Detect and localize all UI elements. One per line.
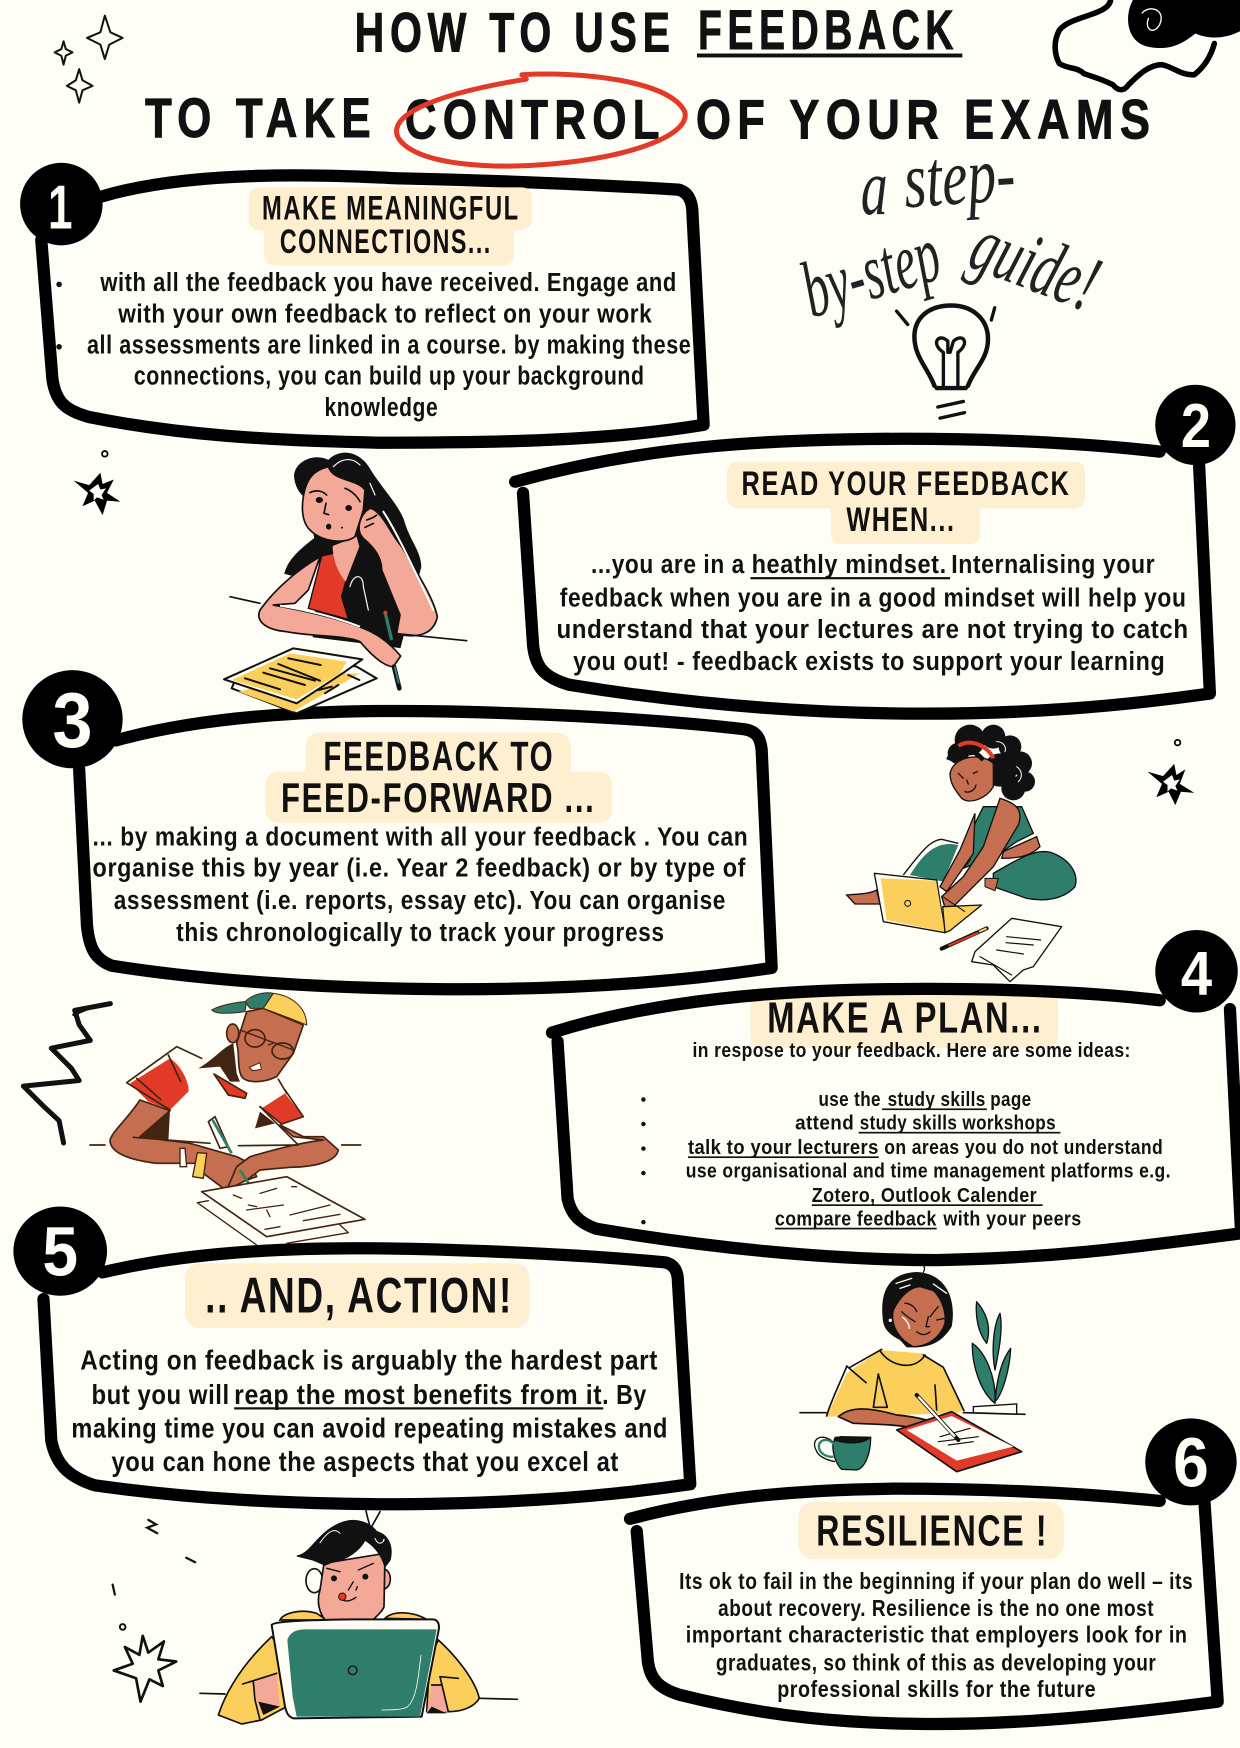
panel 2 body text: Internalising your — [951, 551, 1155, 579]
panel 2 heading: WHEN... — [846, 501, 956, 539]
panel 2: read your feedback when — [515, 385, 1236, 714]
panel 5 body text: Acting on feedback is arguably the hardest part — [80, 1344, 658, 1375]
panel 1 heading: MAKE MEANINGFUL — [262, 190, 520, 228]
panel 3 body text: ... by making a document with all your feedback . You can — [93, 823, 748, 851]
panel 3 heading — [265, 733, 612, 823]
panel 4 body text: page — [990, 1089, 1031, 1111]
panel 4: make a plan — [552, 930, 1240, 1260]
panel 3 frame — [79, 711, 772, 989]
panel 4 body text: study skills workshops — [860, 1113, 1056, 1135]
panel 2 number badge — [1155, 385, 1236, 465]
panel 6 number badge — [1145, 1418, 1237, 1505]
icon: light bulb — [897, 306, 995, 418]
panel 5 body text: but you will — [91, 1379, 230, 1410]
panel 4 number badge: 4 — [1181, 939, 1212, 1009]
panel 4 body text: study skills — [888, 1089, 986, 1111]
panel 6 body text: professional skills for the future — [777, 1676, 1096, 1702]
script subtitle: a step-by-step guide!: step- — [901, 129, 1018, 225]
panel 4 body text: in respose to your feedback. Here are some ideas: — [692, 1040, 1131, 1062]
title: HOW TO USE — [355, 1, 676, 63]
script subtitle: a step-by-step guide!: guide! — [959, 199, 1112, 329]
script subtitle: a step-by-step guide!: a — [861, 143, 888, 232]
decoration: star left of woman — [74, 451, 120, 515]
panel 5 body text: . By — [602, 1379, 647, 1410]
panel 4 body text: use organisational and time management platforms e.g. — [686, 1161, 1171, 1183]
panel 3 body text — [93, 823, 748, 947]
panel 2 frame — [515, 439, 1210, 714]
panel 5 number badge — [13, 1207, 107, 1296]
panel 4 body text: use the — [818, 1089, 881, 1111]
panel 5 number badge: 5 — [42, 1213, 78, 1291]
panel 2 number badge: 2 — [1181, 391, 1211, 461]
panel 6 heading — [798, 1502, 1064, 1559]
panel 4 body text: compare feedback — [775, 1209, 937, 1231]
panel 1 body text: knowledge — [324, 394, 438, 422]
panel 3: feedback to feed-forward — [22, 670, 772, 989]
panel 2 body text: ...you are in a — [591, 551, 745, 579]
illustration: woman sitting with yellow laptop — [847, 725, 1076, 982]
panel 2 heading — [727, 462, 1085, 544]
panel 4 body text: attend — [795, 1113, 854, 1135]
panel 2 body text: you out! - feedback exists to support your learning — [573, 648, 1165, 676]
icon: cloud scribble — [1055, 0, 1240, 90]
script subtitle: a step-by-step guide! — [791, 129, 1112, 335]
panel 5 body text: you can hone the aspects that you excel at — [112, 1446, 619, 1477]
illustration: woman in yellow tee with tablet and plant — [800, 1265, 1025, 1472]
title: TO TAKE — [145, 87, 377, 149]
panel 1 body text: all assessments are linked in a course. by making these — [87, 331, 691, 359]
panel 5 frame — [43, 1248, 690, 1504]
panel 1: make meaningful connections — [20, 163, 704, 443]
panel 2 body text — [556, 551, 1189, 676]
panel 1 body text: connections, you can build up your background — [134, 363, 645, 391]
decoration: zigzag scribble — [23, 1004, 110, 1143]
panel 1 heading: CONNECTIONS... — [280, 223, 492, 261]
panel 5 heading — [185, 1263, 530, 1328]
panel 4 number badge — [1155, 930, 1238, 1013]
panel 4 body text: with your peers — [942, 1209, 1082, 1231]
panel 4 body text: Zotero, Outlook Calender — [812, 1185, 1037, 1207]
panel 5 body text: making time you can avoid repeating mistakes and — [71, 1412, 668, 1443]
illustration: woman thinking with papers — [224, 453, 467, 713]
panel 2 body text: heathly mindset. — [752, 551, 947, 579]
title: CONTROL — [405, 88, 666, 150]
panel 1 number badge — [20, 163, 103, 245]
panel 5: and action — [13, 1207, 690, 1504]
illustration: man with green laptop — [200, 1511, 517, 1724]
panel 5 body text: reap the most benefits from it — [234, 1379, 602, 1410]
panel 1 frame — [41, 175, 704, 443]
panel 2 heading: READ YOUR FEEDBACK — [742, 465, 1071, 503]
panel 6: resilience — [630, 1418, 1237, 1724]
decoration: star and dashes beside laptop man — [113, 1520, 195, 1702]
panel 3 body text: organise this by year (i.e. Year 2 feedback) or by type of — [93, 854, 746, 882]
decoration: star right of sitting woman — [1147, 740, 1194, 805]
panel 1 heading — [249, 187, 532, 265]
panel 4 body text — [641, 1040, 1171, 1231]
panel 1 number badge: 1 — [48, 173, 72, 243]
red circle around CONTROL — [397, 74, 685, 166]
panel 3 heading: FEEDBACK TO — [323, 734, 554, 780]
panel 4 heading highlight and text — [750, 995, 1058, 1048]
panel 3 number badge: 3 — [52, 676, 93, 764]
panel 3 body text: assessment (i.e. reports, essay etc). You can organise — [114, 887, 726, 915]
illustration: man in cap writing — [90, 993, 365, 1245]
panel 2 body text: understand that your lectures are not trying to catch — [556, 616, 1189, 644]
title — [145, 0, 1156, 150]
panel 1 body text — [56, 269, 691, 422]
panel 5 heading: .. AND, ACTION! — [205, 1267, 513, 1323]
script subtitle: a step-by-step guide!: by-step — [791, 209, 950, 335]
panel 3 number badge — [22, 670, 123, 768]
panel 5 body text — [71, 1344, 668, 1477]
panel 1 body text: with all the feedback you have received. Engage and — [100, 269, 677, 297]
panel 4 frame — [552, 989, 1240, 1260]
panel 4 heading highlight and text: MAKE A PLAN... — [767, 995, 1043, 1043]
panel 4 body text: on areas you do not understand — [884, 1137, 1163, 1159]
panel 3 body text: this chronologically to track your progress — [176, 919, 665, 947]
title: FEEDBACK — [698, 0, 959, 61]
panel 6 frame — [630, 1489, 1218, 1724]
panel 6 heading: RESILIENCE ! — [816, 1508, 1048, 1556]
icon: sparkles — [55, 16, 123, 103]
panel 3 heading: FEED-FORWARD ... — [281, 775, 595, 821]
panel 6 body text — [679, 1568, 1193, 1702]
panel 1 body text: with your own feedback to reflect on your work — [117, 300, 652, 328]
panel 6 number badge: 6 — [1173, 1423, 1209, 1501]
panel 4 body text: talk to your lecturers — [688, 1137, 879, 1159]
